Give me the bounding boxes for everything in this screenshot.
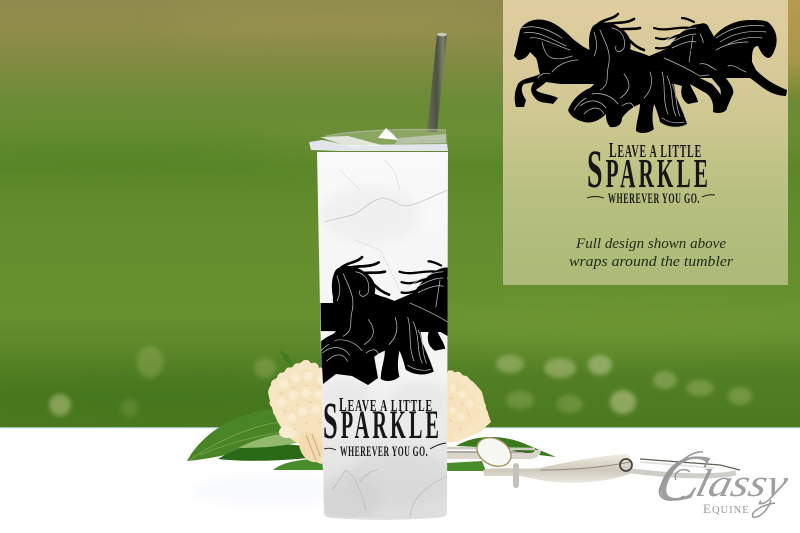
horse: left bbox=[514, 19, 602, 107]
panel caption bbox=[569, 236, 733, 270]
panel caption: Full design shown above bbox=[575, 236, 726, 252]
tumbler body with marble wrap bbox=[317, 152, 455, 525]
tumbler slogan: WHEREVER YOU GO. bbox=[340, 444, 428, 460]
tumbler lid bbox=[309, 128, 448, 151]
snaffle bit bbox=[447, 432, 740, 488]
tumbler slogan: SPARKLE bbox=[323, 393, 442, 450]
design preview panel bbox=[503, 0, 788, 285]
panel slogan: LEAVE A LITTLE bbox=[609, 138, 702, 162]
horse: far right bbox=[690, 20, 787, 110]
flower: left peony bbox=[268, 360, 328, 466]
leaves bbox=[187, 350, 556, 471]
four black horses artwork bbox=[514, 14, 787, 133]
wrap print: horses on tumbler bbox=[320, 256, 448, 385]
tumbler slogan: LEAVE A LITTLE bbox=[339, 394, 433, 416]
tumbler slogan bbox=[323, 393, 446, 460]
panel slogan bbox=[587, 138, 715, 207]
reusable straw bbox=[427, 33, 447, 132]
Classy Equine logo: EQUINE bbox=[703, 501, 750, 516]
white table bbox=[0, 427, 800, 533]
panel caption: wraps around the tumbler bbox=[569, 254, 733, 270]
Classy Equine logo: C bbox=[647, 442, 716, 515]
Classy Equine logo bbox=[647, 442, 793, 517]
Classy Equine logo: lassy bbox=[692, 462, 793, 505]
flower: right peony bbox=[446, 372, 491, 443]
panel slogan: WHEREVER YOU GO. bbox=[608, 191, 700, 207]
